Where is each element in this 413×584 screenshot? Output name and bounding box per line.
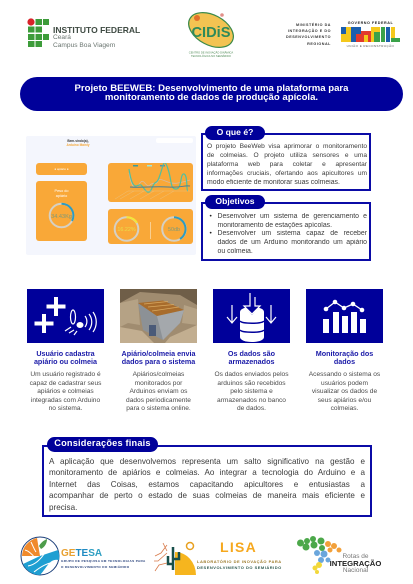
list: Objetivos: Desenvolver um sistema capaz de receber (218, 230, 367, 237)
logo: CIDiS: TECNOLÓGICA NO SEMIÁRIDO (191, 53, 231, 58)
description: Acessando o sistema os (309, 371, 380, 378)
weight panel (36, 181, 87, 241)
list: Objetivos (210, 212, 367, 255)
text: O que é: O projeto BeeWeb visa aprimorar o monitoramento (207, 143, 367, 150)
step 2: envio de dados (120, 289, 197, 412)
logo: Instituto Federal (27, 18, 140, 49)
photo: beehive (120, 289, 197, 343)
line chart panel (108, 163, 193, 202)
heading: Objetivos: Objetivos (215, 196, 255, 206)
dashboard header: Arduino Mainly (66, 143, 90, 147)
gauges panel: 16.22% (117, 227, 136, 233)
description: integradas com Arduino (31, 396, 100, 404)
panel: Considerações finais (42, 437, 372, 517)
logo: Governo Federal Brasil (341, 21, 400, 48)
description (308, 371, 380, 412)
heading (228, 349, 275, 366)
logo text: Ministério: MINISTÉRIO DA (296, 23, 331, 27)
title banner: Projeto BEEWEB: Desenvolvimento de uma plataforma para (74, 82, 349, 94)
heading: Considerações finais: Considerações finais (54, 438, 151, 448)
description: usuários podem (321, 380, 368, 386)
text: Considerações finais: A aplicação que desenvolvemos representa um salto significativo na gestão e (49, 456, 365, 466)
description: Os dados enviados pelos (214, 371, 289, 378)
step 3: armazenamento (213, 289, 290, 412)
description: colmeias. (331, 405, 358, 412)
logo: LISA: LABORATÓRIO DE INOVAÇÃO PARA (197, 559, 282, 564)
icon: plus signs and bee (27, 289, 104, 343)
heading: O que é: O que é? (217, 127, 253, 137)
description (126, 371, 191, 412)
description (30, 371, 102, 412)
panel: O que é (201, 126, 371, 191)
logo: GETESA (20, 536, 146, 576)
heading: O que é (205, 126, 265, 140)
description: Apiários/colmeias (133, 371, 184, 378)
logo: Rotas de Integração: Nacional (343, 567, 368, 574)
description: capaz de cadastrar seus (30, 380, 101, 386)
logo text: Ministério: DESENVOLVIMENTO (286, 35, 331, 39)
text: O que é: informações cruciais, ofertando aos apicultores um (207, 170, 367, 177)
heading: Os dados são (228, 349, 275, 358)
logo: GETESA: GETESA (61, 548, 102, 559)
heading: Usuário cadastra (36, 349, 95, 358)
gauges panel (108, 209, 193, 244)
title banner: monitoramento de dados de produção apícola. (105, 92, 318, 103)
heading (122, 349, 196, 366)
logo: LISA (154, 539, 282, 575)
logo: Governo Federal Brasil: UNIÃO E RECONSTRUÇÃO (347, 44, 394, 48)
dashboard header: Bem-vindo(a), (67, 139, 89, 143)
dashboard screenshot (26, 136, 196, 255)
list: Objetivos: • (210, 212, 212, 220)
gauges panel: 50db (168, 227, 180, 233)
description: apiários e colmeias (37, 388, 94, 395)
text: Considerações finais (49, 456, 365, 512)
logo text: Ministério: REGIONAL (307, 42, 331, 46)
heading: dados para o sistema (122, 356, 195, 366)
description: arduinos são recebidos (217, 380, 286, 386)
logo: CIDiS: CIDiS (192, 24, 230, 41)
heading: Objetivos (205, 195, 265, 209)
description: dados periodicamente (126, 396, 191, 404)
text: Considerações finais: monitoramento de apiários e colmeias. Ao integrar a tecnologia do Arduino e a (49, 468, 365, 477)
heading: dados (334, 356, 355, 366)
text: O que é: plataforma web para coletar e apresentar (207, 161, 367, 168)
icon: database with arrows (213, 289, 290, 343)
dashboard button: ● apiário ● (54, 167, 69, 171)
list: Objetivos: Desenvolver um sistema de gerenciamento e (218, 212, 367, 220)
logo: Instituto Federal: INSTITUTO FEDERAL (53, 25, 140, 35)
heading: Apiário/colmeia envia (122, 349, 195, 358)
logo: Rotas de Integração (297, 536, 381, 574)
description: para o sistema online. (126, 405, 191, 412)
description: monitorados por (135, 380, 182, 386)
text: Considerações finais: acompanhar de perto o estado de suas colmeias de maneira mais eficiente e (49, 491, 365, 500)
heading: armazenados (229, 356, 274, 366)
logo: CIDiS (188, 12, 234, 58)
text: O que é (207, 143, 367, 186)
description: no sistema. (49, 405, 82, 412)
text: O que é: modo eficiente de monitorar suas colmeias. (207, 179, 340, 186)
list: Objetivos: • (210, 230, 212, 237)
description: de dados. (237, 405, 266, 412)
heading: apiário ou colmeia (34, 356, 97, 366)
weight panel: 34.43Kg (51, 214, 72, 220)
heading: Considerações finais (47, 437, 158, 452)
logo text: Ministério: INTEGRAÇÃO E DO (288, 29, 331, 33)
step 4: monitoração (306, 289, 383, 412)
dashboard header (66, 139, 90, 147)
weight panel: Peso do (55, 189, 68, 193)
weight panel: apiário (56, 194, 67, 198)
logo: LISA: DESENVOLVIMENTO DO SEMIÁRIDO (197, 564, 282, 570)
text: Considerações finais: precisa. (49, 502, 77, 512)
icon: bar and line chart (306, 289, 383, 343)
heading (34, 349, 98, 366)
logo: Rotas de Integração: Rotas de (342, 553, 369, 560)
logo: Rotas de Integração: INTEGRAÇÃO (330, 558, 381, 568)
panel: Objetivos (201, 195, 371, 261)
text: O que é: de colmeias. O projeto utiliza sensores e uma (207, 152, 367, 159)
heading (316, 349, 373, 366)
logo: Governo Federal Brasil: GOVERNO FEDERAL (348, 21, 393, 25)
text: Considerações finais: Internet das Coisas, estamos capacitando apicultores e entusiastas a (49, 480, 365, 488)
description: Arduinos enviam os (130, 388, 187, 395)
logo: LISA: LISA (220, 539, 257, 555)
logo: Instituto Federal: Ceará (53, 34, 71, 41)
description: visualizar os dados de (312, 388, 377, 395)
description: Um usuário registrado é (30, 371, 101, 378)
description: seus apiários e/ou (318, 396, 371, 404)
logo: CIDiS: CENTRO DE INOVAÇÃO DINÂMICA (189, 50, 233, 54)
heading: Monitoração dos (316, 349, 373, 358)
title banner (20, 77, 403, 111)
list: Objetivos: monitoramento de estações apícolas. (218, 222, 332, 228)
description (214, 371, 289, 412)
description: pelo sistema e (230, 388, 273, 395)
logo: GETESA: GRUPO DE PESQUISA EM TECNOLOGIAS PARA (61, 559, 146, 563)
step 1: cadastro (27, 289, 104, 412)
list: Objetivos: dados de um Arduino monitorando um apiário (218, 239, 367, 246)
logo: GETESA: O DESENVOLVIMENTO DO SEMIÁRIDO (61, 564, 129, 568)
description: armazenados no banco (217, 396, 286, 404)
logo text: Ministério (286, 22, 331, 46)
dashboard button (36, 163, 87, 175)
logo: Instituto Federal: Campus Boa Viagem (53, 42, 115, 49)
list: Objetivos: ou colmeia. (218, 248, 253, 255)
